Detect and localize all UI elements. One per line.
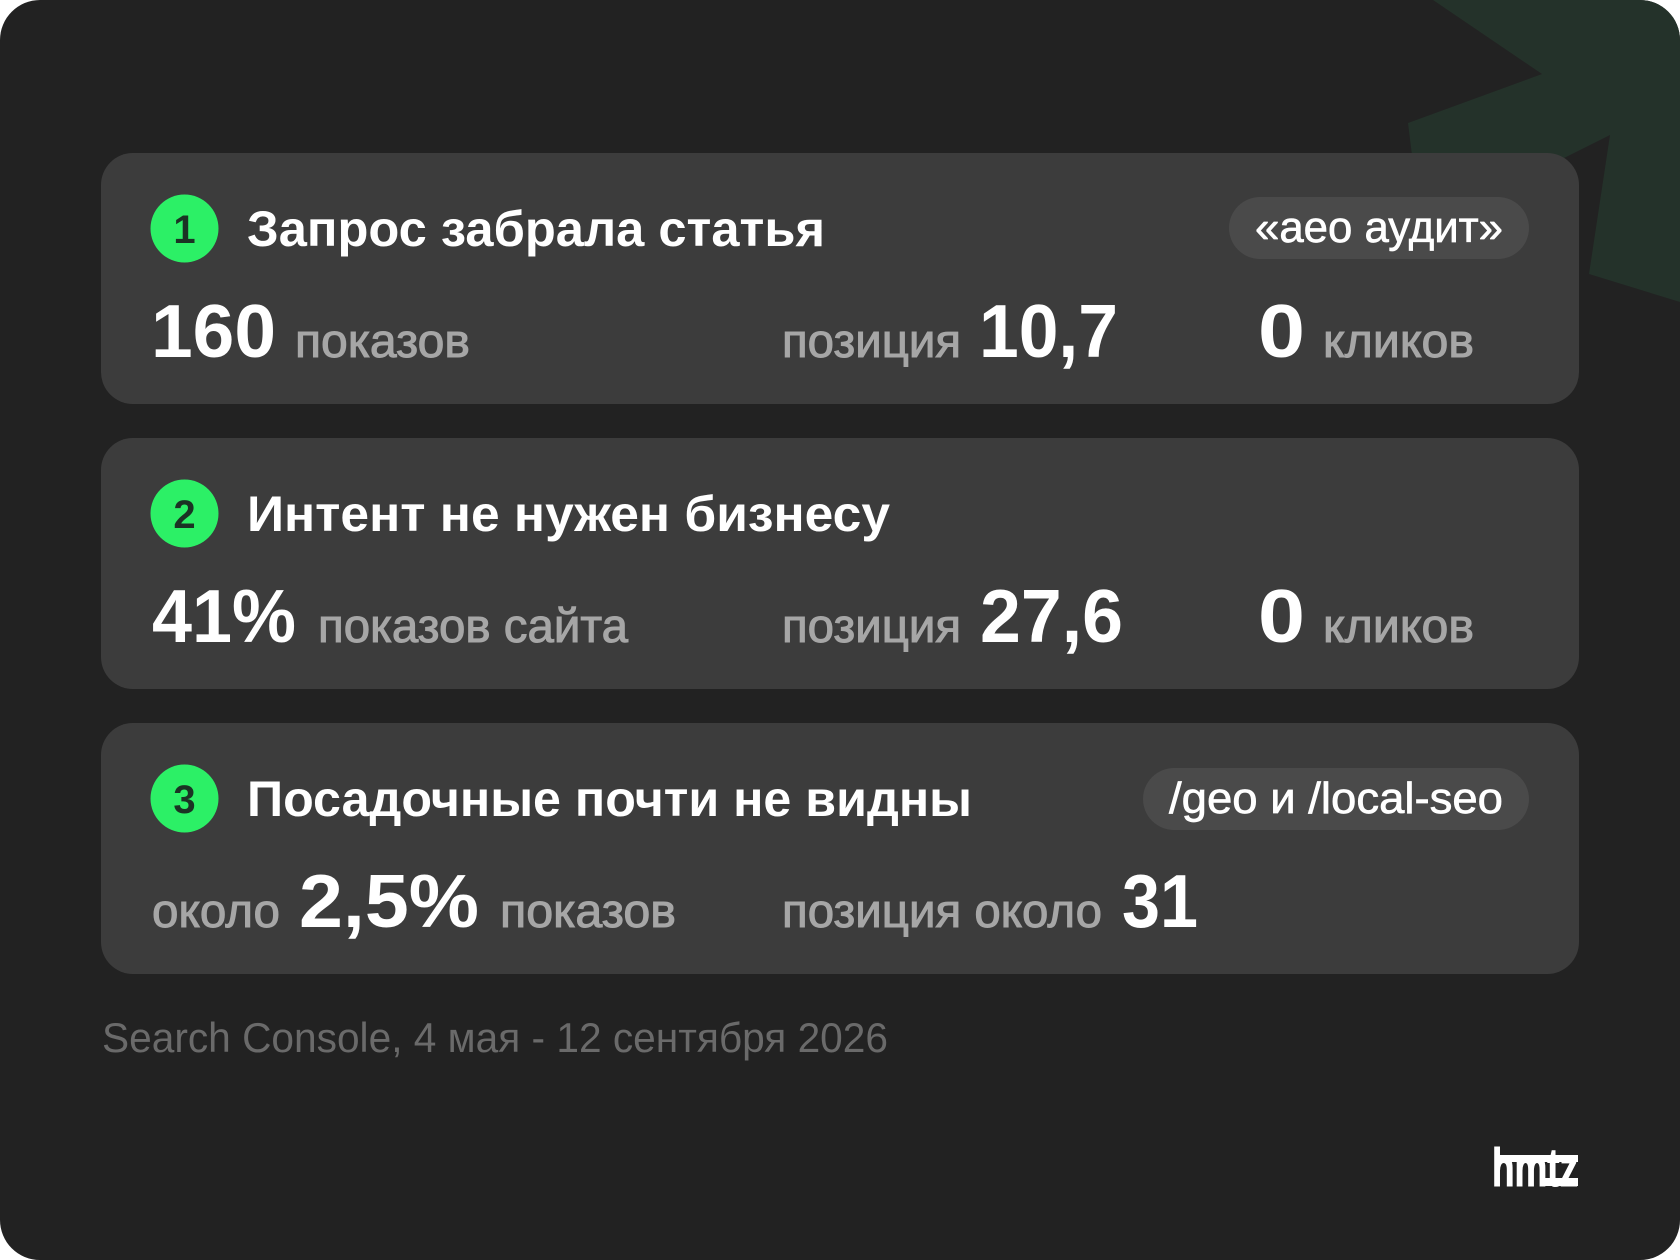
decorative green star <box>1408 0 1680 302</box>
heading: card 1: Запрос забрала статья <box>247 201 825 257</box>
number badge 3: 3 <box>173 778 196 822</box>
stat: clicks <box>1258 574 1474 658</box>
stat: impressions <box>151 289 470 373</box>
stat: position: позиция <box>782 599 961 652</box>
source note: Search Console, 4 мая - 12 сентября 2026 <box>102 1014 888 1061</box>
tag: aeo audit: «аео аудит» <box>1255 203 1503 252</box>
stat: position <box>782 859 1198 943</box>
stat: clicks: кликов <box>1323 314 1474 367</box>
stat: position: 10,7 <box>979 289 1118 373</box>
panel: card 3 <box>101 723 1579 974</box>
stat: impressions: показов <box>295 314 470 367</box>
number badge 2 <box>150 480 218 548</box>
number badge 1: 1 <box>173 208 196 252</box>
tag: landing pages <box>1143 768 1529 830</box>
stat: position <box>782 574 1123 658</box>
stat: clicks: 0 <box>1258 574 1305 658</box>
heading: card 2: Интент не нужен бизнесу <box>247 486 890 542</box>
number badge 2: 2 <box>173 493 196 537</box>
stat: share of impressions: 41% <box>152 574 296 658</box>
stat: position: позиция около <box>782 884 1102 937</box>
logo <box>1492 1138 1578 1198</box>
stat: position: 27,6 <box>980 574 1123 658</box>
number badge 3 <box>150 764 218 832</box>
tag: landing pages: /geo и /local-seo <box>1169 774 1503 823</box>
stat: clicks <box>1258 289 1474 373</box>
stat: clicks: 0 <box>1258 289 1305 373</box>
stat: share of impressions: показов <box>500 884 676 937</box>
stat: share of impressions: показов сайта <box>318 599 629 652</box>
stat: share of impressions: 2,5% <box>299 859 479 943</box>
stat: share of impressions: около <box>152 884 280 937</box>
number badge 1 <box>150 194 218 262</box>
stat: impressions: 160 <box>151 289 276 373</box>
tag: aeo audit <box>1229 197 1529 259</box>
stat: position: позиция <box>782 314 961 367</box>
stat: share of impressions <box>152 574 629 658</box>
panel: card 2 <box>101 438 1579 689</box>
stat: position: 31 <box>1122 859 1198 943</box>
heading: card 3: Посадочные почти не видны <box>247 771 972 827</box>
panel: card 1 <box>101 153 1579 404</box>
stat: clicks: кликов <box>1323 599 1474 652</box>
logo: hmtz <box>1492 1138 1578 1198</box>
stat: share of impressions <box>152 859 676 943</box>
stat: position <box>782 289 1118 373</box>
